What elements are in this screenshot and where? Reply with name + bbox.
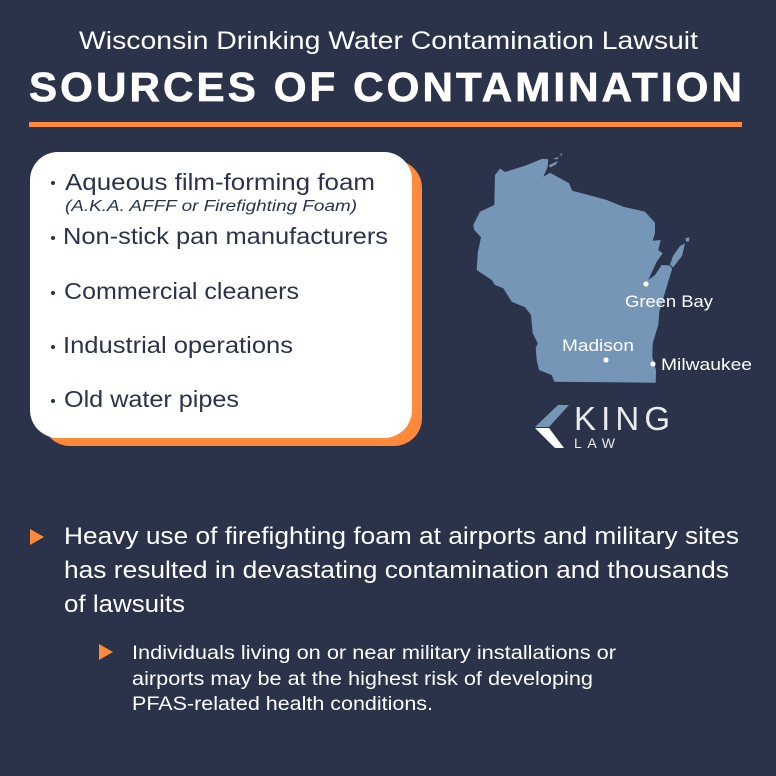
panel: contamination sources list — [30, 152, 422, 446]
city: Green Bay: Green Bay — [625, 292, 714, 311]
logo mark — [535, 405, 569, 448]
callout text: has resulted in devastating contamination and thousands — [64, 557, 729, 584]
callout text — [64, 523, 739, 618]
callout: firefighting foam — [30, 523, 739, 618]
card shadow — [42, 160, 422, 446]
city: Madison — [562, 336, 634, 363]
city: Green Bay — [625, 281, 714, 311]
sub callout text: airports may be at the highest risk of developing — [132, 668, 593, 690]
list item: non-stick pan manufacturers: Non-stick pan manufacturers — [63, 223, 388, 249]
callout text: Heavy use of firefighting foam at airports and military sites — [64, 523, 739, 550]
list item: industrial operations: Industrial operations — [63, 332, 293, 358]
map: Wisconsin — [473, 152, 752, 383]
logo subtext: LAW — [574, 435, 616, 451]
logo wordmark: KING — [574, 400, 670, 437]
list item: commercial cleaners: Commercial cleaners — [64, 278, 299, 304]
icon: arrow bullet — [30, 529, 44, 545]
list item: aqueous film-forming foam: (A.K.A. AFFF or Firefighting Foam) — [65, 198, 357, 215]
icon: arrow bullet — [99, 644, 113, 660]
state shape — [473, 152, 690, 383]
logo: King Law — [535, 400, 670, 451]
card — [30, 152, 412, 438]
subtitle: Wisconsin Drinking Water Contamination Lawsuit — [79, 27, 698, 55]
list item: old water pipes: Old water pipes — [64, 386, 239, 412]
sub callout text: Individuals living on or near military installations or — [132, 642, 617, 664]
list item: aqueous film-forming foam — [51, 169, 375, 215]
callout text: of lawsuits — [64, 591, 185, 618]
title underline — [29, 122, 742, 127]
sub callout text — [132, 642, 617, 715]
sub callout text: PFAS-related health conditions. — [132, 693, 433, 715]
city: Milwaukee: Milwaukee — [661, 355, 752, 374]
title: SOURCES OF CONTAMINATION — [29, 64, 745, 110]
city: Madison: Madison — [562, 336, 634, 355]
list item: aqueous film-forming foam: Aqueous film-forming foam — [65, 169, 375, 195]
callout: highest risk — [99, 642, 617, 715]
